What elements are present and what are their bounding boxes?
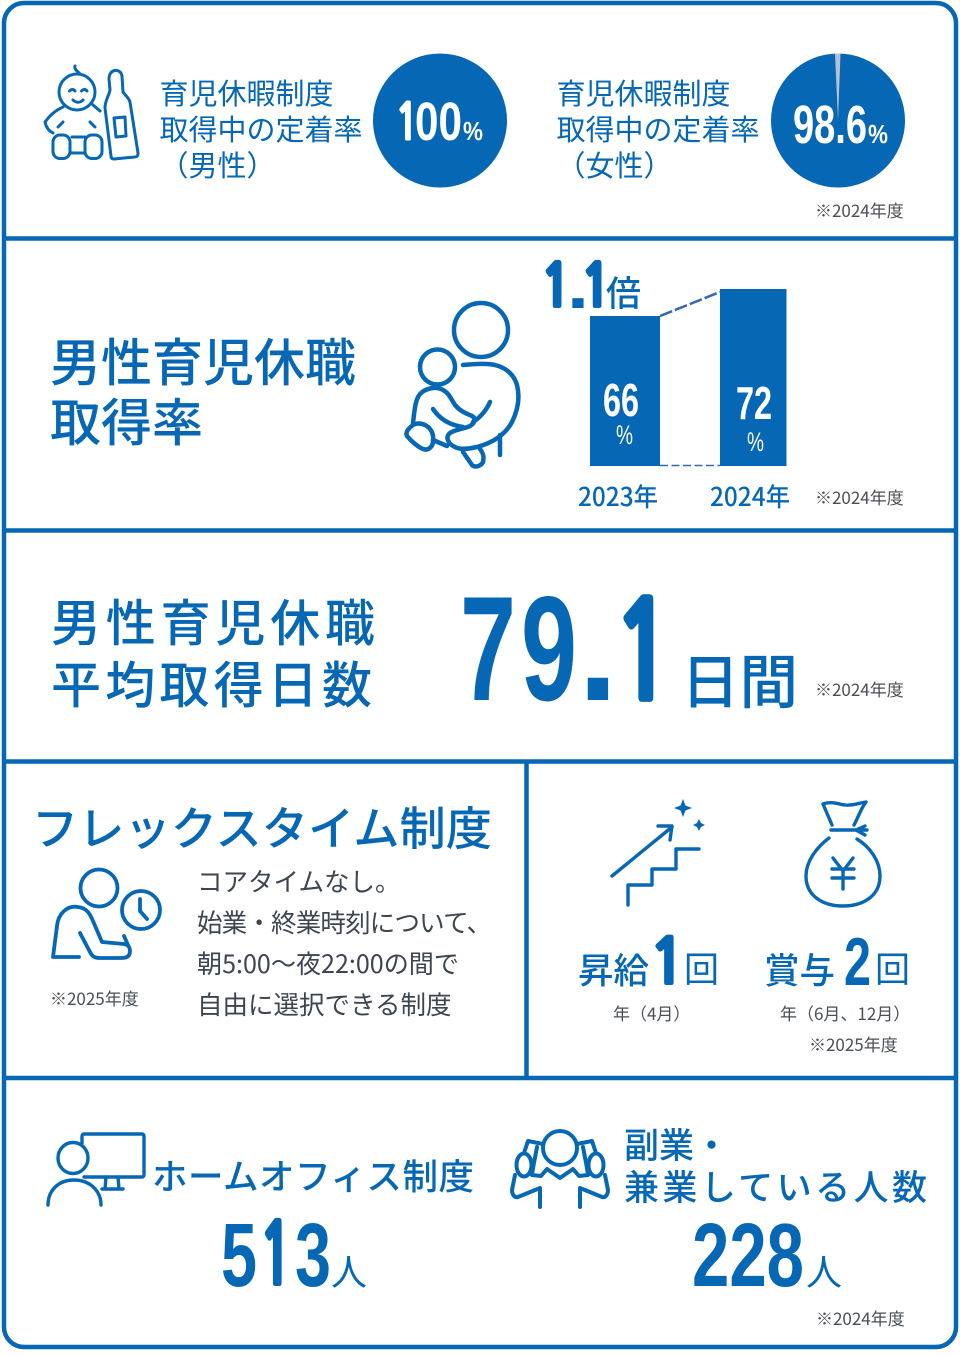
value: 79.1 days: 7 xyxy=(460,565,516,732)
stat: raise once a year: 年（4月） xyxy=(613,1000,690,1025)
chart: leave rate bars: % xyxy=(616,420,633,450)
chart: leave rate bars: 2024年 xyxy=(710,477,790,514)
note: fiscal year: ※2025年度 xyxy=(50,985,139,1010)
value: 79.1 days: 日間 xyxy=(681,635,798,720)
stat: bonus twice a year: 年（6月、12月） xyxy=(780,1000,910,1025)
heading: male parental leave rate: 取得率 xyxy=(50,382,203,456)
heading: flextime system: フレックスタイム制度 xyxy=(32,793,492,859)
note: fiscal year: ※2024年度 xyxy=(815,676,904,701)
value: 513 people: 人 xyxy=(331,1244,367,1296)
label: 1.1 times: 1 xyxy=(541,257,571,315)
panel: home office xyxy=(48,1134,474,1306)
note: fiscal year: ※2024年度 xyxy=(815,197,904,222)
text: flextime description: コアタイムなし。 xyxy=(197,862,400,899)
text: female retention label: 育児休暇制度 xyxy=(556,71,731,113)
text: male retention label: 取得中の定着率 xyxy=(160,107,363,149)
chart: leave rate bars xyxy=(541,248,790,514)
value: 513 people: 1 xyxy=(259,1213,293,1297)
heading: average days taken: 平均取得日数 xyxy=(51,646,372,718)
chart: male retention 100 percent: 1 xyxy=(395,98,419,148)
text: flextime description: 自由に選択できる制度 xyxy=(197,985,452,1022)
stat: bonus twice a year xyxy=(764,924,910,1025)
value: 513 people: 5 xyxy=(221,1206,257,1306)
label: 1.1 times: 倍 xyxy=(606,266,641,317)
stat: raise once a year: 1 xyxy=(649,932,686,994)
value: 228 people: 人 xyxy=(806,1244,842,1296)
chart: leave rate bars: % xyxy=(747,427,764,457)
panel: parental leave retention xyxy=(45,54,905,222)
chart: leave rate bars: 2023年 xyxy=(578,477,658,514)
label: 1.1 times: . xyxy=(567,248,589,322)
label: 1.1 times: 1 xyxy=(581,257,611,315)
panel: male parental leave rate xyxy=(50,248,904,514)
panel: raises and bonuses xyxy=(578,799,910,1056)
text: flextime description: 朝5:00～夜22:00の間で xyxy=(197,944,459,981)
icon: person with monitor xyxy=(48,1134,144,1205)
chart: female retention 98.6 percent xyxy=(771,54,905,188)
panel: average leave days xyxy=(51,565,904,732)
label: side job title: 副業・ xyxy=(624,1118,729,1169)
stat: raise once a year: 昇給 xyxy=(578,943,649,994)
value: 79.1 days: 9 xyxy=(521,565,577,732)
panel: side jobs xyxy=(512,1118,927,1330)
value: 79.1 days xyxy=(460,565,798,732)
note: fiscal year: ※2025年度 xyxy=(809,1031,898,1056)
heading: male parental leave rate: 男性育児休職 xyxy=(50,322,356,396)
text: flextime description: 始業・終業時刻について、 xyxy=(197,903,492,940)
text: female retention label: 取得中の定着率 xyxy=(556,107,760,149)
stat: raise once a year: 回 xyxy=(684,942,719,993)
icon: stairs with arrow xyxy=(612,799,705,905)
icon: baby and bottle xyxy=(45,66,138,159)
icon: money bag xyxy=(806,802,880,906)
text: male retention label: 育児休暇制度 xyxy=(160,71,334,113)
label: 1.1 times xyxy=(541,248,641,322)
note: fiscal year: ※2024年度 xyxy=(815,484,904,509)
value: 513 people: 3 xyxy=(295,1206,331,1306)
chart: female retention 98.6 percent: % xyxy=(868,119,888,149)
stat: raise once a year xyxy=(578,932,719,1025)
heading: average days taken: 男性育児休職 xyxy=(51,584,375,656)
value: 513 people xyxy=(221,1206,367,1306)
value: 79.1 days: 1 xyxy=(612,586,675,720)
chart: male retention 100 percent: % xyxy=(463,116,483,146)
stat: bonus twice a year: 2 xyxy=(844,924,871,1000)
icon: person with hands on head xyxy=(512,1131,608,1207)
value: 79.1 days: . xyxy=(578,565,618,732)
text: female retention label: （女性） xyxy=(556,143,673,185)
stat: bonus twice a year: 回 xyxy=(875,942,910,993)
note: fiscal year: ※2024年度 xyxy=(816,1305,905,1330)
chart: leave rate bars: 66 xyxy=(603,374,639,426)
icon: worker with clock xyxy=(53,870,160,958)
chart: male retention 100 percent xyxy=(373,54,507,188)
stat: bonus twice a year: 賞与 xyxy=(764,943,835,994)
value: 228 people: 228 xyxy=(692,1206,804,1306)
label: home office system: ホームオフィス制度 xyxy=(152,1149,474,1200)
text: male retention label: （男性） xyxy=(160,143,276,185)
label: side job title: 兼業している人数 xyxy=(624,1160,927,1211)
icon: parent holding child xyxy=(406,303,518,466)
chart: female retention 98.6 percent: 98.6 xyxy=(793,95,867,155)
chart: male retention 100 percent: 00 xyxy=(415,92,462,152)
chart: leave rate bars: 72 xyxy=(736,377,772,429)
panel: flextime xyxy=(32,793,492,1022)
